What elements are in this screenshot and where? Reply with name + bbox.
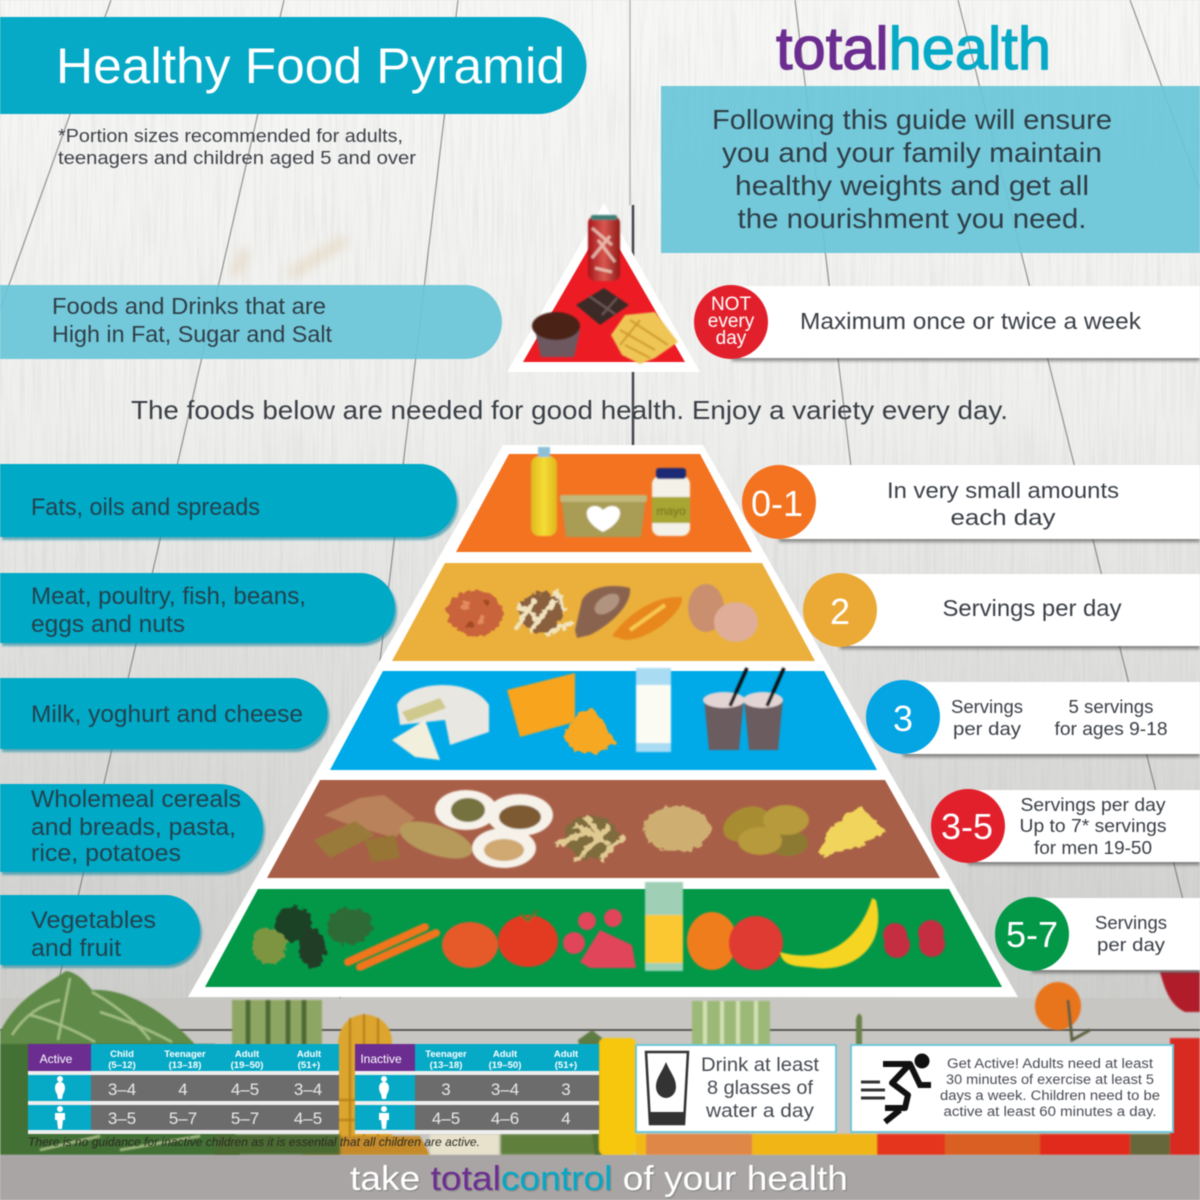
badge: 5-7: 5-7 xyxy=(1006,914,1058,955)
glass of milk xyxy=(636,668,671,752)
badge: 3-5: 3-5 xyxy=(941,806,993,847)
tomatoes xyxy=(442,910,558,968)
table: inactive servings: 4–5 xyxy=(432,1109,460,1128)
serving band: 0-1 xyxy=(742,465,1200,539)
tier: meat, poultry, fish, beans, eggs and nuts xyxy=(392,563,815,661)
mayonnaise jar xyxy=(652,468,690,536)
table: inactive servings: Adult xyxy=(554,1049,579,1060)
broccoli xyxy=(251,906,325,968)
table: active servings: (13–18) xyxy=(169,1060,201,1071)
left label: vegetables and fruit xyxy=(0,895,200,965)
table: inactive servings: (13–18) xyxy=(430,1060,462,1071)
table: active servings: 3–5 xyxy=(108,1109,136,1128)
left label: milk xyxy=(0,678,328,749)
panel: exercise advice: 30 minutes of exercise at least 5 xyxy=(946,1072,1154,1087)
left label: meat: Meat, poultry, fish, beans, xyxy=(31,583,306,610)
intro panel: Following this guide will ensure xyxy=(712,104,1112,135)
title banner: Healthy Food Pyramid xyxy=(56,38,565,94)
left label: wholemeal cereals: rice, potatoes xyxy=(31,840,181,867)
badge: 3-5 xyxy=(931,789,1005,863)
potatoes xyxy=(717,799,809,856)
cabbage xyxy=(0,971,240,1155)
crackers and crispbread xyxy=(314,795,415,862)
table: inactive servings xyxy=(355,1044,599,1134)
table: active servings: Active xyxy=(40,1052,73,1066)
table: active servings xyxy=(28,1044,339,1134)
serving band: 5-7 xyxy=(995,897,1200,971)
serving band: 3: per day xyxy=(953,718,1022,739)
pyramid base: white frame xyxy=(188,445,1018,997)
table: active servings: 4–5 xyxy=(294,1109,322,1128)
label: foods high in fat, sugar and salt: High in Fat, Sugar and Salt xyxy=(52,321,333,347)
panel: water advice: 8 glasses of xyxy=(707,1077,814,1099)
table footnote: There is no guidance for inactive children as it is essential that all children are active. xyxy=(28,1135,480,1149)
badge: 0-1 xyxy=(742,465,816,539)
serving band: 5-7: Servings xyxy=(1095,912,1167,933)
table: active servings: (5–12) xyxy=(108,1060,136,1071)
badge: NOT every day xyxy=(694,285,768,359)
serving band: 0-1: In very small amounts xyxy=(887,478,1119,503)
carrots xyxy=(348,927,436,967)
icon: glass with water drop xyxy=(646,1052,688,1125)
occasional foods frequency band: Maximum once or twice a week xyxy=(800,308,1142,334)
orange xyxy=(687,912,737,970)
table: active servings: 3–4 xyxy=(294,1080,322,1099)
icon: male figure xyxy=(55,1106,65,1129)
baked beans xyxy=(447,590,503,636)
table: inactive servings: 4 xyxy=(561,1109,571,1128)
badge: 5-7 xyxy=(995,897,1069,971)
orange tomato xyxy=(1035,982,1090,1040)
left label: fats, oils and spreads: Fats, oils and spreads xyxy=(31,494,260,521)
oil bottle xyxy=(531,447,557,536)
table: inactive servings: 3 xyxy=(561,1080,571,1099)
table: active servings: Adult xyxy=(297,1049,322,1060)
footer slogan: take totalcontrol of your health xyxy=(350,1160,848,1198)
badge: NOT every day: day xyxy=(716,328,747,349)
left label: milk: Milk, yoghurt and cheese xyxy=(31,701,303,728)
table: active servings: 4 xyxy=(178,1080,188,1099)
table: inactive servings: 3–4 xyxy=(491,1080,519,1099)
panel: exercise advice: days a week. Children need to be xyxy=(940,1088,1160,1103)
rice xyxy=(643,806,711,852)
panel: water advice xyxy=(636,1045,836,1132)
serving band: 3: for ages 9-18 xyxy=(1054,718,1168,739)
table: active servings: Adult xyxy=(235,1049,260,1060)
serving band: 2: Servings per day xyxy=(942,595,1122,621)
left label: meat xyxy=(0,573,395,643)
left label: vegetables and fruit: Vegetables xyxy=(31,907,156,934)
sliced bread xyxy=(395,814,477,866)
table: active servings: (19–50) xyxy=(231,1060,263,1071)
left label: wholemeal cereals xyxy=(0,784,263,872)
footer band xyxy=(0,1155,1200,1200)
mayonnaise jar: mayo xyxy=(656,504,686,518)
icon: female figure xyxy=(379,1076,389,1099)
left label: meat: eggs and nuts xyxy=(31,611,185,638)
badge: 3 xyxy=(866,680,940,754)
bottom vegetable photograph strip xyxy=(0,971,1200,1155)
yoghurt pots with spoons xyxy=(703,668,784,750)
tier: wholemeal cereals, breads, pasta, rice, potatoes xyxy=(267,780,940,878)
serving band: 5-7: per day xyxy=(1097,934,1166,955)
portion size note: teenagers and children aged 5 and over xyxy=(58,148,416,168)
icon: running figure xyxy=(861,1054,931,1122)
badge: 2: 2 xyxy=(830,591,850,632)
table: active servings: 5–7 xyxy=(169,1109,197,1128)
panel: water advice: Drink at least xyxy=(701,1054,820,1076)
label: foods high in fat, sugar and salt: Foods and Drinks that are xyxy=(52,293,326,319)
left label: fats, oils and spreads xyxy=(0,464,456,537)
panel: water advice: water a day xyxy=(705,1100,814,1122)
portion size note xyxy=(58,126,416,168)
serving band: 0-1: each day xyxy=(950,505,1056,530)
pyramid top tier: occasional foods xyxy=(507,203,700,372)
cheddar block xyxy=(507,673,575,737)
table: inactive servings: Inactive xyxy=(360,1052,402,1066)
banana xyxy=(780,898,878,968)
corn cob xyxy=(300,1014,430,1155)
table: inactive servings: 4–6 xyxy=(491,1109,519,1128)
nuts xyxy=(516,590,572,634)
table: active servings: 3–4 xyxy=(108,1080,136,1099)
tier: vegetables and fruit xyxy=(205,882,1002,987)
table: inactive servings: (19–50) xyxy=(489,1060,521,1071)
grated potato xyxy=(820,806,885,857)
tier: fats, oils and spreads xyxy=(456,447,752,552)
sentence: foods needed for good health: The foods below are needed for good health. Enjoy a variety every day. xyxy=(131,395,1008,425)
grapes xyxy=(883,920,945,958)
strawberries xyxy=(563,909,636,968)
glass of juice xyxy=(645,882,683,971)
bowls of cereal xyxy=(435,790,553,868)
apple xyxy=(729,916,783,970)
left label: wholemeal cereals: Wholemeal cereals xyxy=(31,786,241,813)
asparagus xyxy=(232,1000,322,1048)
table: active servings: (51+) xyxy=(298,1060,320,1071)
icon: female figure xyxy=(55,1076,65,1099)
can of soft drink xyxy=(588,215,620,281)
intro panel: the nourishment you need. xyxy=(738,203,1086,234)
panel: exercise advice xyxy=(851,1045,1173,1132)
title banner xyxy=(0,17,586,114)
badge: 0-1: 0-1 xyxy=(751,483,803,524)
serving band: 3 xyxy=(866,680,1200,754)
badge: 2 xyxy=(803,573,877,647)
left label: vegetables and fruit: and fruit xyxy=(31,935,121,962)
kale xyxy=(326,908,372,944)
intro panel xyxy=(661,86,1200,253)
serving band: 3: Servings xyxy=(951,696,1023,717)
icon: male figure xyxy=(379,1106,389,1129)
table: active servings: Teenager xyxy=(164,1049,206,1060)
occasional foods frequency band xyxy=(694,285,1200,359)
portion size note: *Portion sizes recommended for adults, xyxy=(58,126,403,146)
muffin xyxy=(532,312,580,357)
serving band: 3-5: Up to 7* servings xyxy=(1020,816,1166,836)
intro panel: you and your family maintain xyxy=(722,137,1102,168)
table: inactive servings: Adult xyxy=(493,1049,518,1060)
chicken portion xyxy=(612,597,682,640)
spread tub xyxy=(560,495,647,537)
badge: NOT every day: NOT xyxy=(711,294,751,315)
table: active servings: Child xyxy=(110,1049,134,1060)
left label: wholemeal cereals: and breads, pasta, xyxy=(31,814,236,841)
serving band: 3: 5 servings xyxy=(1068,696,1154,717)
brie cheese xyxy=(392,685,489,760)
panel: exercise advice: Get Active! Adults need at least xyxy=(947,1056,1153,1071)
label: foods high in fat, sugar and salt xyxy=(0,285,502,359)
tier: milk, yoghurt and cheese xyxy=(330,668,877,770)
badge: 3: 3 xyxy=(893,698,913,739)
panel: exercise advice: active at least 60 minutes a day. xyxy=(944,1104,1156,1119)
chocolate xyxy=(576,288,629,325)
table: inactive servings: Teenager xyxy=(425,1049,467,1060)
crisps xyxy=(611,312,678,364)
ground foliage under tables xyxy=(215,1134,600,1155)
eggs xyxy=(688,584,758,642)
badge: NOT every day: every xyxy=(708,311,755,332)
intro panel: healthy weights and get all xyxy=(735,170,1089,201)
grated cheddar xyxy=(562,708,617,755)
meat xyxy=(575,586,630,638)
table: active servings: 4–5 xyxy=(231,1080,259,1099)
table: active servings: 5–7 xyxy=(231,1109,259,1128)
table: inactive servings: 3 xyxy=(441,1080,451,1099)
table: inactive servings: (51+) xyxy=(555,1060,577,1071)
serving band: 3-5: for men 19-50 xyxy=(1034,838,1152,858)
celery and peppers xyxy=(578,972,1200,1155)
serving band: 3-5 xyxy=(931,789,1200,863)
serving band: 3-5: Servings per day xyxy=(1020,795,1166,815)
serving band: 2 xyxy=(803,573,1200,647)
pasta xyxy=(556,815,625,862)
logo: totalhealth: totalhealth xyxy=(776,15,1051,82)
